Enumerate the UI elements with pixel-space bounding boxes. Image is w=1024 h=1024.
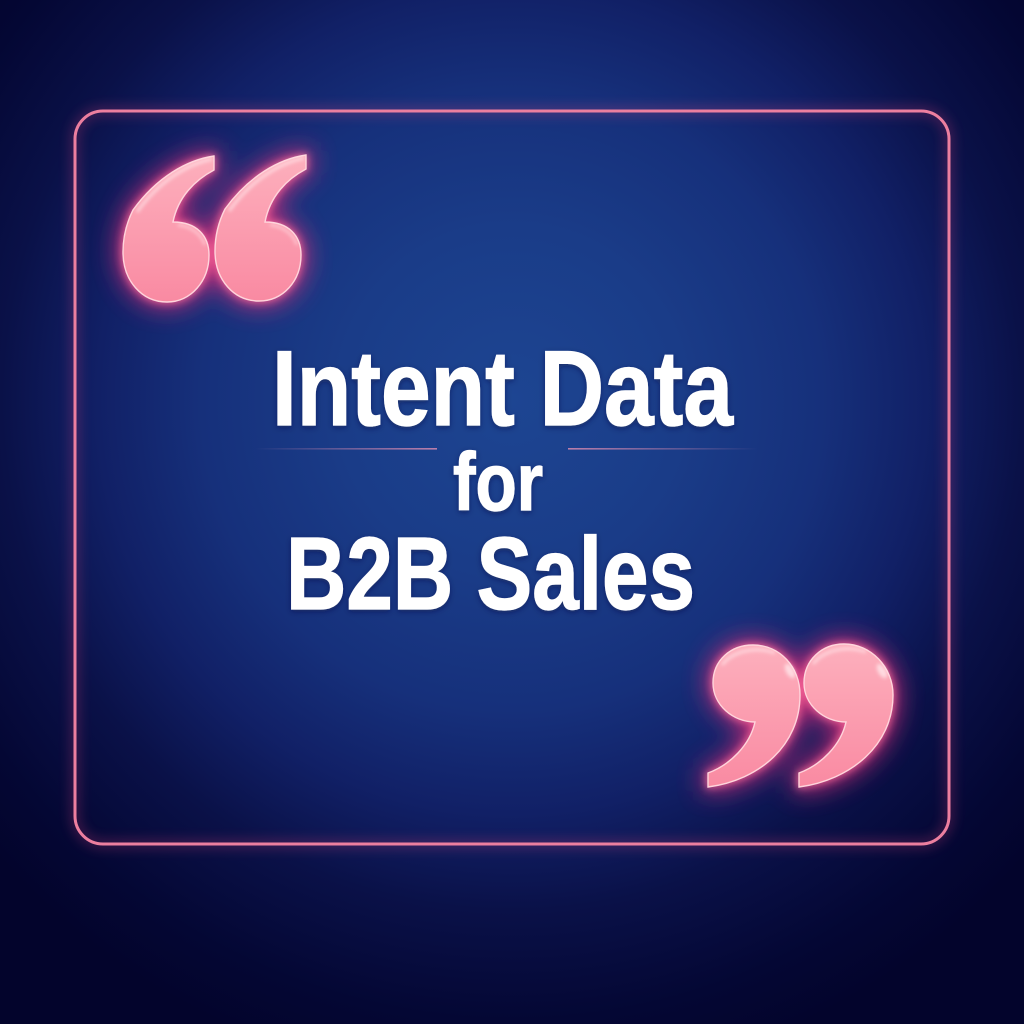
title line: for: for (453, 437, 543, 528)
title line: B2B Sales: B2B Sales (286, 516, 695, 631)
divider: left rule (255, 448, 437, 450)
glowing rounded frame (75, 111, 949, 844)
title line: Intent Data: Intent Data (272, 328, 734, 448)
divider: right rule (568, 448, 758, 450)
icon: opening quotation mark (123, 155, 306, 302)
icon: closing quotation mark (708, 644, 893, 787)
